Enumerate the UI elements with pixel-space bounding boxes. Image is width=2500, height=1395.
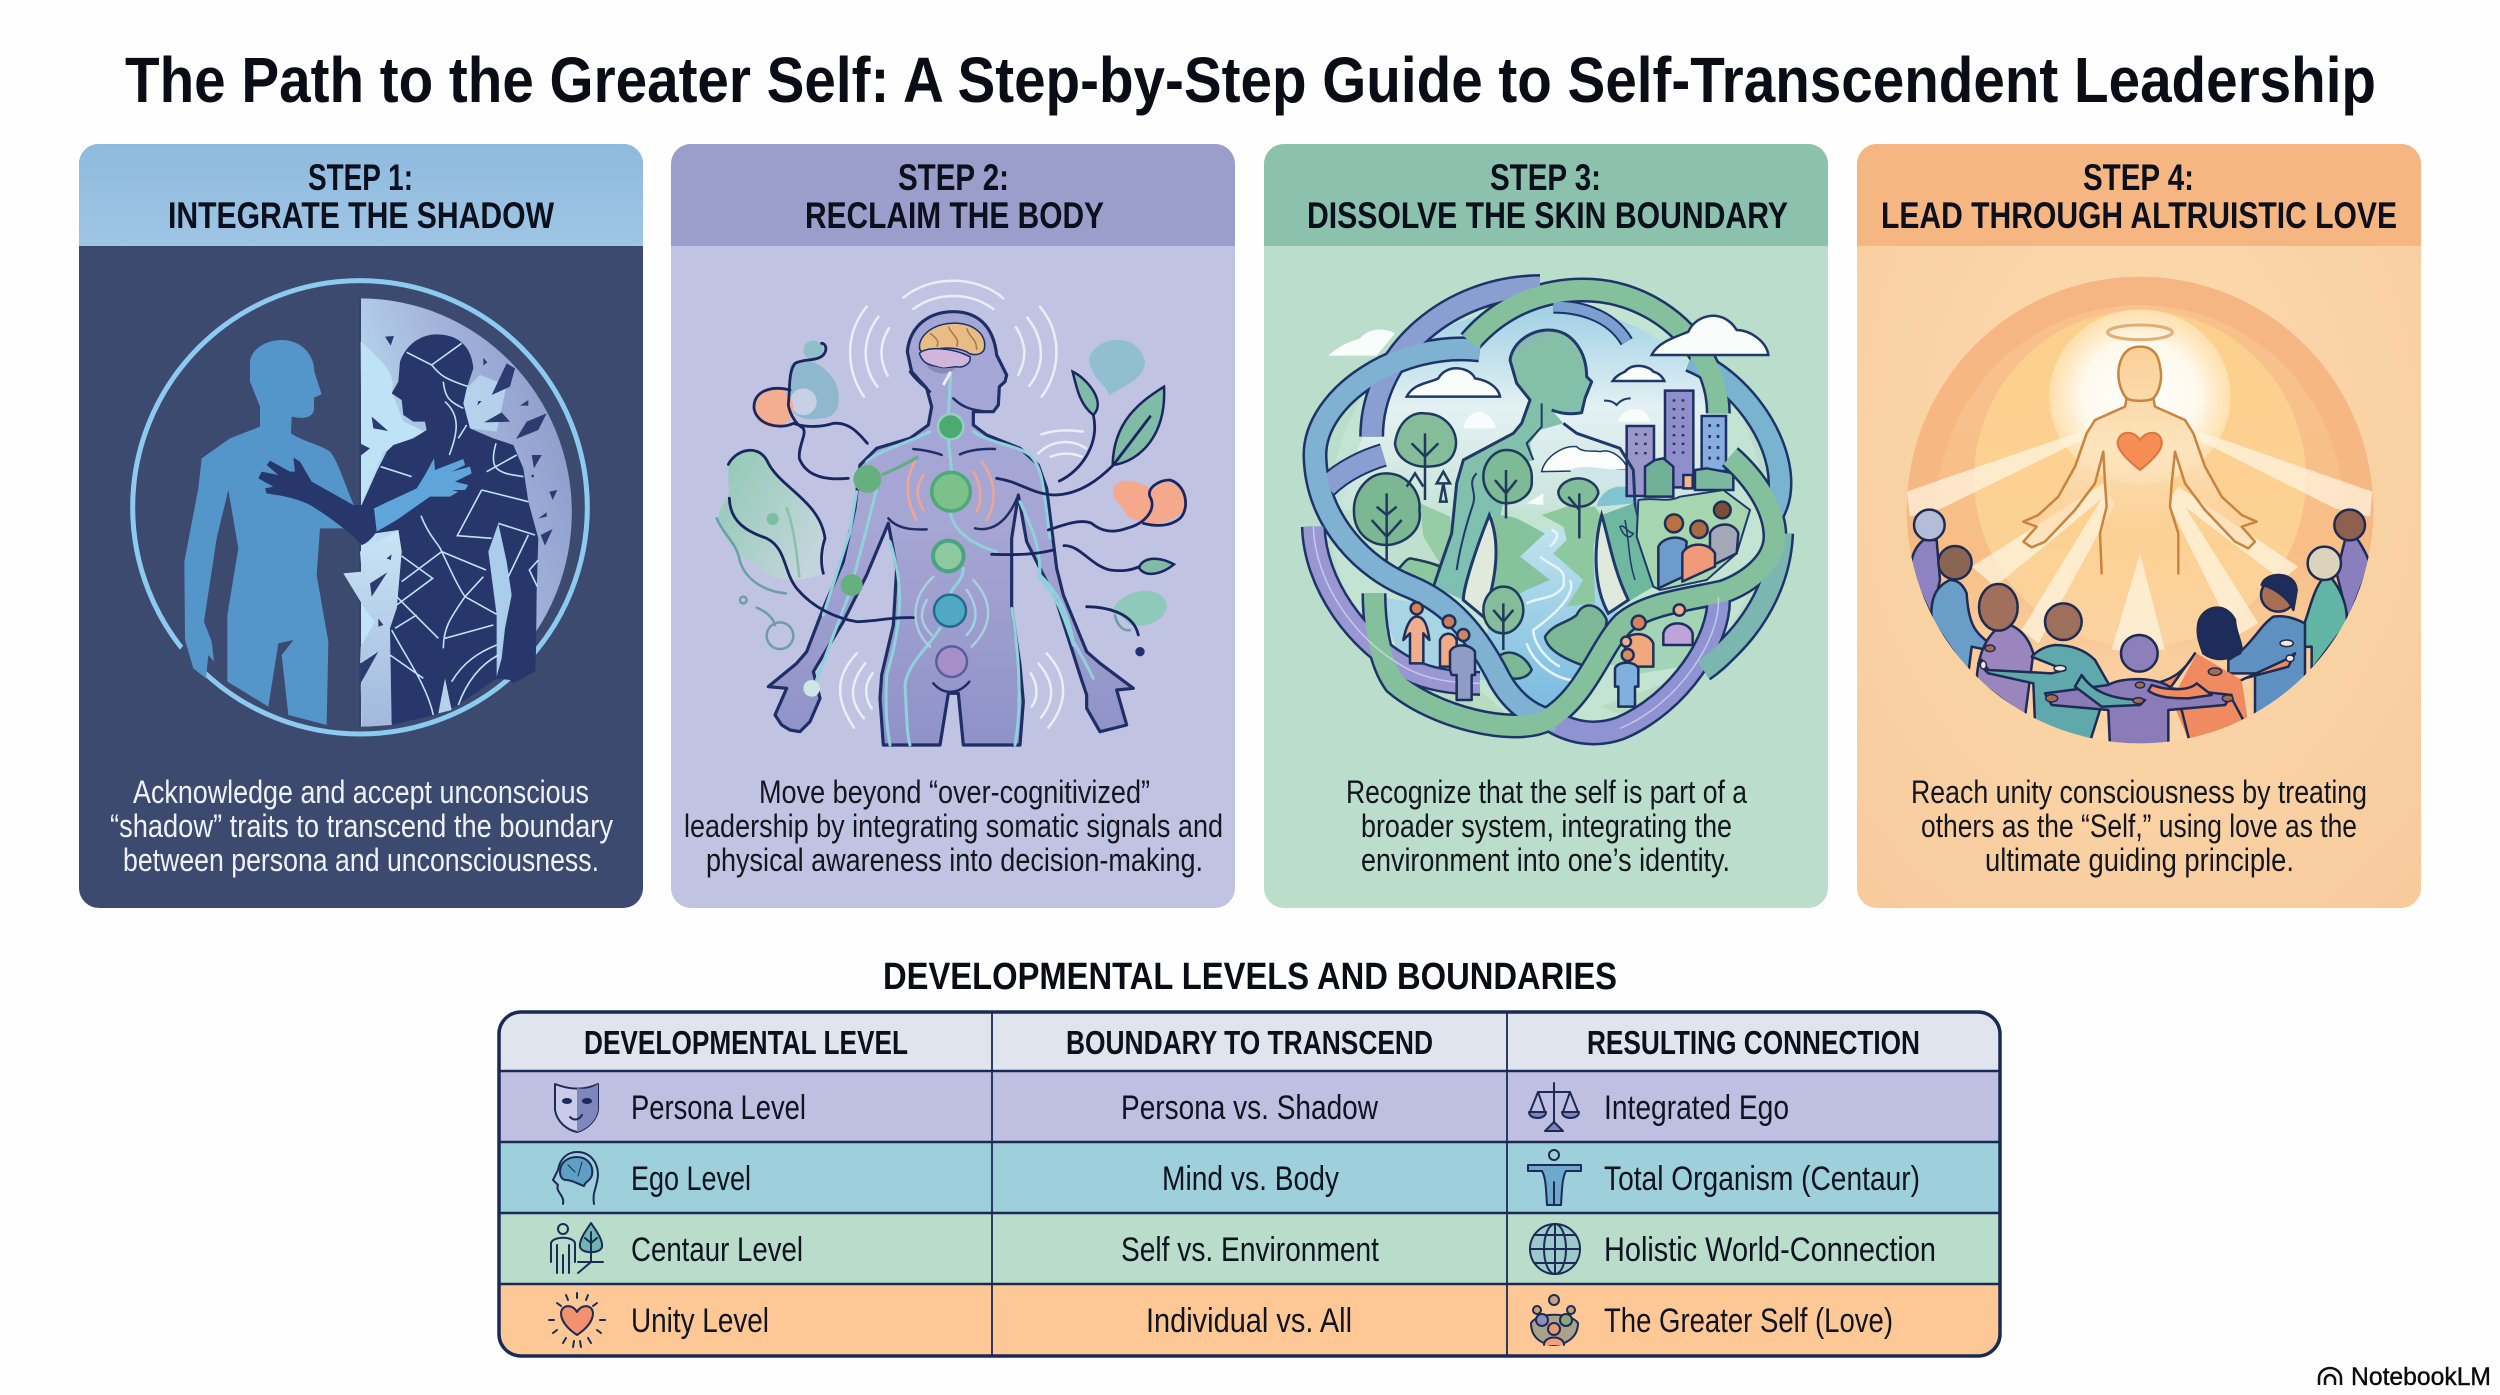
ground	[1342, 510, 1457, 587]
step 2 description	[684, 774, 1223, 878]
step 4 header: LEAD THROUGH ALTRUISTIC LOVE	[1881, 195, 2397, 236]
step 1 header: STEP 1:	[308, 157, 413, 198]
step 1 description: “shadow” traits to transcend the boundary	[110, 808, 613, 844]
icon: mask	[555, 1084, 598, 1132]
step 3 description: Recognize that the self is part of a	[1346, 774, 1747, 810]
step 3 description	[1346, 774, 1747, 878]
icon: group of people	[1531, 1295, 1578, 1345]
row: ego	[631, 1160, 1920, 1198]
icon: head with brain	[553, 1152, 598, 1204]
step 4 header	[1857, 144, 2421, 246]
step 2 description: leadership by integrating somatic signals and	[684, 808, 1223, 844]
step 2 header: RECLAIM THE BODY	[805, 195, 1104, 236]
icon: radiant heart	[549, 1293, 605, 1347]
row: unity: Unity Level	[631, 1302, 769, 1340]
left figure: persona	[184, 340, 363, 725]
icon: outstretched person	[1528, 1150, 1581, 1205]
row: centaur: Centaur Level	[631, 1231, 803, 1269]
icon: person and tree	[551, 1223, 603, 1273]
groups of people	[1403, 502, 1738, 707]
vibration arcs	[840, 281, 1086, 728]
chakras	[938, 414, 963, 439]
shadow arm reaching to chest	[258, 458, 377, 545]
icon: balance scales	[1529, 1083, 1579, 1131]
connecting vines	[728, 343, 1186, 635]
row: centaur: Holistic World-Connection	[1604, 1231, 1936, 1269]
row: persona: Integrated Ego	[1604, 1089, 1789, 1127]
table heading: DEVELOPMENTAL LEVELS AND BOUNDARIES	[883, 956, 1617, 998]
step 1 header: INTEGRATE THE SHADOW	[168, 195, 554, 236]
column headers: DEVELOPMENTAL LEVEL	[584, 1024, 908, 1061]
step 2 header: STEP 2:	[898, 157, 1009, 198]
light fragments	[343, 530, 402, 727]
right figure: shadow	[362, 334, 538, 725]
step 3 header: DISSOLVE THE SKIN BOUNDARY	[1307, 195, 1788, 236]
panel: step 1 integrate the shadow	[79, 144, 643, 908]
central glowing figure	[2023, 347, 2257, 573]
panel: step 4 lead through altruistic love	[1857, 144, 2421, 908]
step 1 description: between persona and unconsciousness.	[123, 842, 599, 878]
trees	[1354, 413, 1607, 679]
row: ego: Ego Level	[631, 1160, 751, 1198]
panel: step 2 reclaim the body	[671, 144, 1235, 908]
step 2 header	[671, 144, 1235, 246]
distant clouds and hill	[1542, 447, 1628, 472]
column headers	[584, 1024, 1920, 1061]
row: centaur: Self vs. Environment	[1121, 1231, 1379, 1269]
step 4 description: others as the “Self,” using love as the	[1921, 808, 2357, 844]
row: centaur	[631, 1231, 1936, 1269]
row: ego: Total Organism (Centaur)	[1604, 1160, 1920, 1198]
illustration: person merged with landscape inside woven rings	[1313, 287, 1782, 733]
body	[768, 312, 1133, 745]
row: ego: Mind vs. Body	[1162, 1160, 1339, 1198]
halo	[2108, 325, 2172, 340]
step 4 header: STEP 4:	[2083, 157, 2194, 198]
row: persona: Persona vs. Shadow	[1121, 1089, 1378, 1127]
panel: step 3 dissolve the skin boundary	[1264, 144, 1828, 908]
cracks	[381, 343, 538, 715]
persona arm reaching to chest	[374, 458, 472, 532]
row: unity: The Greater Self (Love)	[1604, 1302, 1893, 1340]
step 4 description	[1911, 774, 2367, 878]
row: persona	[631, 1089, 1789, 1127]
illustration: radiant figure embraced by a circle of people	[1907, 277, 2373, 747]
leaves	[1113, 387, 1164, 465]
illustration: body with chakras, brain and leaves	[717, 281, 1187, 745]
step 3 description: broader system, integrating the	[1361, 808, 1732, 844]
brain	[919, 323, 985, 385]
heart	[2118, 433, 2162, 470]
light glow behind the shadow figure	[361, 342, 425, 502]
step 4 description: ultimate guiding principle.	[1985, 842, 2294, 878]
step 3 header: STEP 3:	[1490, 157, 1601, 198]
woven rings	[1313, 287, 1782, 733]
people in a circle	[1911, 510, 2370, 747]
upper right ground	[1637, 490, 1750, 590]
river	[1487, 523, 1620, 710]
right body strip	[1602, 503, 1653, 602]
step 3 header	[1264, 144, 1828, 246]
central hills	[1480, 515, 1550, 617]
column headers: BOUNDARY TO TRANSCEND	[1066, 1024, 1433, 1061]
rays	[1907, 432, 2372, 650]
step 2 description: Move beyond “over-cognitivized”	[759, 774, 1150, 810]
step 1 description	[110, 774, 613, 878]
sky	[1343, 307, 1730, 510]
silhouette: head, neck and left torso	[1433, 330, 1592, 600]
buildings	[1627, 391, 1733, 497]
step 1 header	[79, 144, 643, 246]
table: developmental levels and boundaries	[499, 1012, 2000, 1356]
illustration: persona and shadow figures in a circle	[133, 281, 587, 734]
inner energy lines	[813, 375, 1093, 745]
interior clouds	[1407, 366, 1664, 397]
step 1 description: Acknowledge and accept unconscious	[133, 774, 589, 810]
outer clouds	[1652, 316, 1768, 355]
icon: globe	[1530, 1224, 1580, 1274]
row: unity: Individual vs. All	[1146, 1302, 1352, 1340]
step 4 description: Reach unity consciousness by treating	[1911, 774, 2367, 810]
river highlights	[1527, 530, 1573, 680]
step 2 description: physical awareness into decision-making.	[706, 842, 1203, 878]
row: persona: Persona Level	[631, 1089, 806, 1127]
logo: NotebookLM: NotebookLM	[2351, 1363, 2491, 1391]
row: unity	[631, 1302, 1893, 1340]
column headers: RESULTING CONNECTION	[1587, 1024, 1920, 1061]
step 3 description: environment into one’s identity.	[1361, 842, 1730, 878]
